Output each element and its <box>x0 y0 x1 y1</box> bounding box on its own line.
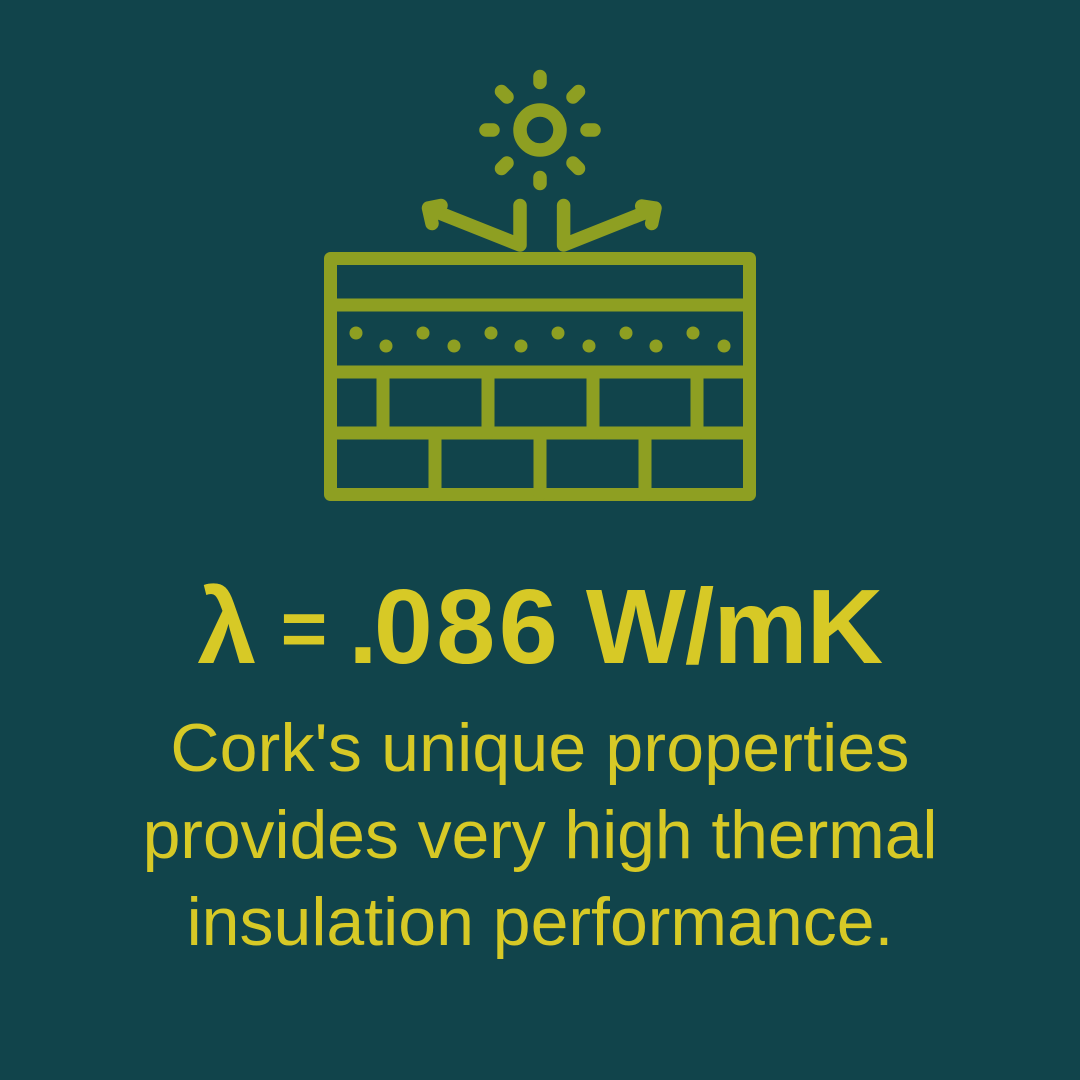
text block: description: Cork's unique properties <box>170 710 910 786</box>
heading: lambda value: λ <box>198 568 256 686</box>
heading: lambda value: 086 <box>374 568 561 686</box>
text block: description: provides very high thermal <box>143 797 937 873</box>
text block: description: insulation performance. <box>187 884 893 960</box>
icon: insulation granules <box>350 326 730 352</box>
heading: lambda value: . <box>348 568 378 686</box>
text block: description <box>143 710 937 960</box>
heading: lambda value: W/mK <box>586 568 882 686</box>
heading: lambda value: = <box>281 584 327 673</box>
icon: layered wall <box>330 258 750 494</box>
icon: reflected heat arrows <box>428 206 655 245</box>
icon: sun <box>486 76 594 184</box>
heading: lambda value <box>198 568 882 686</box>
